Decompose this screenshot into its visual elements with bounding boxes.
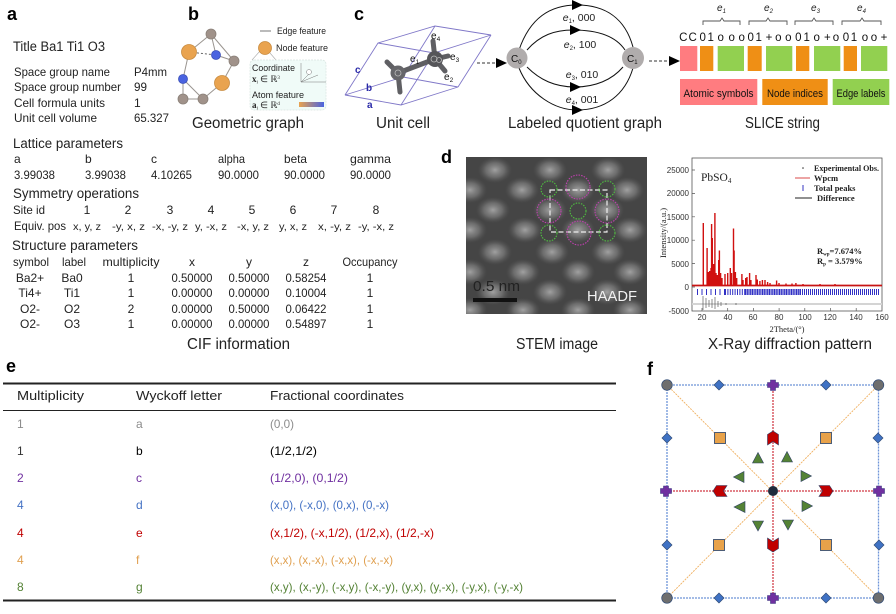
chart legend: Total peaks bbox=[814, 183, 856, 193]
edge labels: 3 bbox=[572, 76, 576, 82]
edge diamonds (d) bbox=[662, 380, 884, 603]
brace labels bbox=[717, 3, 867, 15]
caption: unit cell: Unit cell bbox=[376, 115, 430, 132]
row b: (1/2,1/2) bbox=[270, 444, 317, 458]
row d: d bbox=[136, 498, 143, 512]
diagonal orange lines bbox=[667, 385, 878, 598]
brace labels: 1 bbox=[723, 9, 726, 15]
edge labels: e bbox=[566, 69, 572, 81]
fit statistics: p bbox=[823, 262, 826, 268]
symmetry operations bbox=[13, 186, 394, 233]
symmetry operations: 6 bbox=[290, 203, 297, 217]
diffraction peaks bbox=[692, 213, 882, 310]
fit statistics: R bbox=[817, 246, 823, 256]
row c: 2 bbox=[17, 471, 24, 485]
symmetry operations: 7 bbox=[331, 203, 338, 217]
legend: node indices: Node indices bbox=[767, 88, 823, 100]
row a: 1 bbox=[17, 417, 24, 431]
graph edges bbox=[183, 34, 234, 99]
compound label: 4 bbox=[728, 177, 732, 185]
legend: edge labels: Edge labels bbox=[836, 88, 886, 100]
lattice parameters: a bbox=[14, 152, 21, 166]
colour-coded string segments bbox=[680, 46, 887, 71]
legend: edge labels bbox=[833, 79, 889, 105]
brace labels: 2 bbox=[769, 9, 774, 15]
chart legend bbox=[795, 163, 879, 203]
node feature box: i bbox=[256, 106, 258, 112]
legend: edge and node feature: Node feature bbox=[276, 43, 328, 54]
graph nodes bbox=[178, 29, 239, 104]
edge labels: 1 bbox=[569, 19, 573, 25]
table header: Fractional coordinates bbox=[270, 388, 405, 403]
structure parameters table: 1 bbox=[128, 271, 135, 285]
structure parameters table: O3 bbox=[64, 317, 80, 331]
structure parameters table: Structure parameters bbox=[12, 238, 138, 253]
brace labels: e bbox=[857, 3, 863, 14]
centre site (b) bbox=[768, 486, 778, 496]
symmetry operations: x, -y, z bbox=[318, 221, 351, 233]
x axis ticks and labels: 40 bbox=[724, 313, 733, 322]
structure parameters table: 0.06422 bbox=[286, 302, 327, 316]
structure parameters table: 0.50000 bbox=[172, 271, 213, 285]
axis titles: Intensity/(a.u.) bbox=[658, 208, 668, 258]
label f: f bbox=[647, 359, 654, 379]
structure parameters table: 0.00000 bbox=[172, 317, 213, 331]
row f: f bbox=[136, 553, 140, 567]
crystal metadata: Unit cell volume bbox=[14, 111, 97, 125]
chart legend: Difference bbox=[817, 193, 855, 203]
structure parameters table: 0.10004 bbox=[286, 286, 327, 300]
nodes C0 and C1: 1 bbox=[634, 60, 638, 66]
bond labels: 2 bbox=[450, 77, 454, 84]
structure parameters table: Ti1 bbox=[64, 286, 80, 300]
scale bar: 0.5 nm bbox=[473, 278, 520, 295]
lattice parameters: c bbox=[151, 152, 157, 166]
nodes C0 and C1: C bbox=[511, 54, 518, 65]
legend: edge and node feature: Edge feature bbox=[277, 26, 326, 37]
labeled quotient graph bbox=[506, 0, 662, 132]
crystal metadata: 65.327 bbox=[134, 111, 169, 125]
row a: a bbox=[136, 417, 143, 431]
structure parameters table: 1 bbox=[367, 317, 374, 331]
x axis ticks and labels: 120 bbox=[823, 313, 837, 322]
structure parameters table: 0.00000 bbox=[228, 317, 270, 331]
symmetry operations: 5 bbox=[249, 203, 256, 217]
row d bbox=[17, 498, 389, 512]
HAADF label: HAADF bbox=[587, 288, 637, 305]
node feature box: Coordinate bbox=[252, 63, 295, 74]
symmetry operations: Site id bbox=[13, 203, 45, 217]
crystal metadata: P4mm bbox=[134, 65, 167, 79]
node feature box: Atom feature bbox=[252, 90, 304, 101]
node feature box bbox=[250, 60, 326, 112]
label c: c bbox=[354, 4, 364, 24]
y axis ticks and labels: -5000 bbox=[669, 307, 690, 316]
row d: (x,0), (-x,0), (0,x), (0,-x) bbox=[270, 498, 389, 512]
structure parameters table bbox=[12, 238, 398, 331]
node feature box: 3 bbox=[277, 76, 280, 81]
lattice parameters: 4.10265 bbox=[151, 168, 192, 182]
table rules bbox=[3, 382, 616, 602]
label d: d bbox=[441, 147, 452, 167]
structure parameters table: multiplicity bbox=[102, 255, 160, 269]
XRD chart bbox=[658, 158, 889, 353]
orange squares (f) bbox=[714, 432, 832, 550]
corner sites (a) bbox=[662, 380, 884, 603]
brace labels: 3 bbox=[817, 9, 821, 15]
node feature box: d bbox=[277, 102, 280, 107]
nodes C0 and C1 bbox=[506, 47, 644, 69]
chart legend: Experimental Obs. bbox=[814, 163, 879, 173]
node feature box: x bbox=[252, 74, 256, 84]
symmetry operations: 4 bbox=[208, 203, 215, 217]
edges bbox=[519, 5, 633, 110]
legend: node indices bbox=[762, 79, 828, 105]
x axis ticks and labels: 80 bbox=[775, 313, 784, 322]
crystal metadata: Cell formula units bbox=[14, 96, 105, 110]
row g bbox=[17, 580, 523, 594]
edge labels: 4 bbox=[572, 101, 576, 107]
bond labels: 4 bbox=[437, 36, 441, 43]
axis labels: c bbox=[355, 65, 361, 76]
symmetry operations: y, x, z bbox=[279, 221, 307, 233]
structure parameters table: 0.00000 bbox=[172, 302, 213, 316]
string characters: CC01ooo01+oo01o+o01oo+ bbox=[679, 32, 888, 44]
Bragg position ticks bbox=[697, 289, 880, 295]
legend: edge and node feature bbox=[252, 26, 328, 60]
nodes C0 and C1: C bbox=[627, 54, 634, 65]
symmetry operations: -x, -y, z bbox=[152, 221, 188, 233]
node feature box: a bbox=[252, 100, 256, 110]
structure parameters table: 0.00000 bbox=[172, 286, 213, 300]
structure parameters table: Occupancy bbox=[342, 255, 398, 269]
node feature box: ∈ ℝ bbox=[258, 100, 277, 110]
structure parameters table: 1 bbox=[128, 317, 135, 331]
bond labels: e bbox=[450, 52, 456, 63]
structure parameters table: 1 bbox=[367, 302, 374, 316]
symmetry operations: 1 bbox=[84, 203, 91, 217]
structure parameters table: O2- bbox=[20, 302, 40, 316]
row d: 4 bbox=[17, 498, 24, 512]
table header bbox=[17, 388, 405, 403]
row c bbox=[17, 471, 348, 485]
y axis ticks and labels: 10000 bbox=[667, 236, 690, 245]
row g: g bbox=[136, 580, 143, 594]
label b: b bbox=[188, 4, 199, 24]
HAADF micrograph bbox=[466, 157, 647, 314]
red cross lines bbox=[667, 385, 878, 598]
crystal metadata bbox=[14, 65, 169, 125]
fit statistics bbox=[817, 246, 863, 268]
structure parameters table: 1 bbox=[367, 286, 374, 300]
row g: (x,y), (x,-y), (-x,y), (-x,-y), (y,x), (y,-x), (-y,x), (-y,-x) bbox=[270, 580, 523, 594]
crystal metadata: Space group name bbox=[14, 65, 110, 79]
y axis ticks and labels bbox=[667, 166, 695, 316]
symmetry operations: 2 bbox=[125, 203, 132, 217]
structure parameters table: 0.54897 bbox=[286, 317, 327, 331]
caption: CIF information: CIF information bbox=[187, 336, 290, 353]
row e: 4 bbox=[17, 526, 24, 540]
structure parameters table: 1 bbox=[367, 271, 374, 285]
panel c: unit cell bbox=[345, 4, 491, 132]
brace labels: e bbox=[764, 3, 770, 14]
caption: labeled quotient graph: Labeled quotient graph bbox=[508, 115, 662, 132]
unit cell wireframe bbox=[345, 26, 491, 105]
lattice parameters: beta bbox=[284, 152, 307, 166]
lattice parameters: Lattice parameters bbox=[13, 136, 123, 151]
axis labels: b bbox=[366, 83, 372, 94]
unit cell overlay bbox=[537, 175, 619, 245]
structure parameters table: 2 bbox=[128, 302, 135, 316]
crystal metadata: 99 bbox=[134, 80, 147, 94]
panel d: STEM image bbox=[441, 147, 647, 353]
structure parameters table: 0.58254 bbox=[286, 271, 327, 285]
symmetry operations: Symmetry operations bbox=[13, 186, 139, 201]
row a: (0,0) bbox=[270, 417, 294, 431]
edge labels: 2 bbox=[570, 46, 574, 52]
structure parameters table: symbol bbox=[13, 255, 49, 269]
fit statistics: wp bbox=[823, 252, 830, 258]
bond labels: e bbox=[410, 54, 416, 65]
symmetry operations: 8 bbox=[373, 203, 380, 217]
red chevrons (e) bbox=[713, 431, 833, 552]
symmetry operations: y, -x, z bbox=[195, 221, 227, 233]
x axis ticks and labels: 20 bbox=[698, 313, 707, 322]
structure parameters table: Ti4+ bbox=[18, 286, 42, 300]
axis labels bbox=[355, 65, 373, 111]
edge labels: e bbox=[566, 94, 572, 106]
axis labels: a bbox=[367, 100, 373, 111]
edge labels: , 001 bbox=[575, 94, 598, 106]
y axis ticks and labels: 0 bbox=[685, 283, 690, 292]
arrow: quotient graph to SLICE string bbox=[649, 56, 680, 66]
axis titles bbox=[658, 208, 805, 334]
structure parameters table: 0.50000 bbox=[228, 302, 270, 316]
row b bbox=[17, 444, 317, 458]
lattice parameters: gamma bbox=[350, 152, 391, 166]
row b: b bbox=[136, 444, 143, 458]
edge labels: , 010 bbox=[575, 69, 598, 81]
x axis ticks and labels: 160 bbox=[875, 313, 889, 322]
chart legend: Wpcm bbox=[814, 173, 838, 183]
y axis ticks and labels: 15000 bbox=[667, 213, 690, 222]
symmetry operations: 3 bbox=[167, 203, 174, 217]
structure parameters table: Ba2+ bbox=[16, 271, 44, 285]
structure parameters table: label bbox=[62, 255, 86, 269]
label e: e bbox=[6, 356, 16, 376]
difference curve bbox=[692, 303, 882, 305]
caption: SLICE string: SLICE string bbox=[745, 115, 820, 132]
lattice parameters: 90.0000 bbox=[218, 168, 259, 182]
bond labels: e bbox=[431, 31, 437, 42]
fit statistics: R bbox=[817, 256, 823, 266]
brace labels: e bbox=[811, 3, 817, 14]
bond labels: 1 bbox=[416, 59, 420, 66]
symmetry operations: -x, y, z bbox=[237, 221, 269, 233]
purple plus sites (c) bbox=[660, 380, 884, 604]
bond labels: 3 bbox=[456, 57, 460, 64]
y axis ticks and labels: 25000 bbox=[667, 166, 690, 175]
node feature box: ∈ ℝ bbox=[258, 74, 277, 84]
blue border bbox=[667, 385, 878, 598]
row f: 4 bbox=[17, 553, 24, 567]
lattice parameters: 90.0000 bbox=[350, 168, 391, 182]
edge labels bbox=[563, 12, 598, 107]
structure parameters table: 0.00000 bbox=[228, 286, 270, 300]
panel b: geometric graph bbox=[178, 4, 328, 132]
plot frame bbox=[692, 158, 882, 311]
row b: 1 bbox=[17, 444, 24, 458]
bond labels: e bbox=[444, 72, 450, 83]
panel f: Wyckoff site diagram bbox=[647, 359, 884, 604]
fit statistics: = 3.579% bbox=[826, 256, 863, 266]
structure parameters table: O2- bbox=[20, 317, 40, 331]
structure parameters table: 0.50000 bbox=[228, 271, 270, 285]
structure parameters table: z bbox=[303, 255, 309, 269]
caption: XRD pattern: X-Ray diffraction pattern bbox=[708, 336, 872, 353]
y axis ticks and labels: 5000 bbox=[671, 260, 690, 269]
row c: c bbox=[136, 471, 142, 485]
symmetry operations: x, y, z bbox=[73, 221, 101, 233]
row e: (x,1/2), (-x,1/2), (1/2,x), (1/2,-x) bbox=[270, 526, 434, 540]
symmetry operations: -y, x, z bbox=[112, 221, 145, 233]
symmetry operations: Equiv. pos bbox=[14, 219, 66, 233]
panel a: CIF information bbox=[7, 4, 398, 353]
fit statistics: =7.674% bbox=[830, 246, 862, 256]
x axis ticks and labels bbox=[698, 308, 889, 322]
brace labels: e bbox=[717, 3, 723, 14]
compound label: PbSO bbox=[701, 172, 728, 184]
SLICE string panel bbox=[679, 3, 889, 132]
molecule bonds and atoms bbox=[387, 41, 448, 92]
edge labels: e bbox=[563, 12, 569, 24]
label a: a bbox=[7, 4, 18, 24]
edge braces bbox=[703, 18, 881, 25]
caption: geometric graph: Geometric graph bbox=[192, 115, 304, 132]
brace labels: 4 bbox=[863, 9, 867, 15]
edge labels: , 100 bbox=[573, 39, 596, 51]
green triangles (g) bbox=[734, 452, 812, 531]
arrowheads bbox=[570, 0, 583, 115]
row a bbox=[17, 417, 294, 431]
title line: Title Ba1 Ti1 O3 bbox=[13, 39, 105, 54]
lattice parameters: alpha bbox=[218, 152, 245, 166]
crystal metadata: Space group number bbox=[14, 80, 121, 94]
edge labels: e bbox=[564, 39, 570, 51]
row f: (x,x), (x,-x), (-x,x), (-x,-x) bbox=[270, 553, 393, 567]
bond labels bbox=[410, 31, 460, 84]
structure parameters table: x bbox=[189, 255, 195, 269]
structure parameters table: Ba0 bbox=[61, 271, 83, 285]
lattice parameters: b bbox=[85, 152, 92, 166]
row e: e bbox=[136, 526, 143, 540]
axis titles: 2Theta/(°) bbox=[769, 324, 805, 334]
nodes C0 and C1: 0 bbox=[518, 60, 522, 66]
structure parameters table: O2 bbox=[64, 302, 80, 316]
scale bar bbox=[473, 278, 520, 302]
legend: atomic symbols bbox=[680, 79, 757, 105]
node feature box: i bbox=[256, 80, 258, 86]
panel e: Wyckoff table bbox=[3, 356, 616, 602]
caption: STEM image: STEM image bbox=[516, 336, 598, 353]
lattice parameters: 90.0000 bbox=[284, 168, 325, 182]
edge labels: , 000 bbox=[572, 12, 595, 24]
row c: (1/2,0), (0,1/2) bbox=[270, 471, 348, 485]
structure parameters table: 1 bbox=[128, 286, 135, 300]
x axis ticks and labels: 60 bbox=[749, 313, 758, 322]
row f bbox=[17, 553, 393, 567]
y axis ticks and labels: 20000 bbox=[667, 189, 690, 198]
symmetry operations: -y, -x, z bbox=[358, 221, 394, 233]
legend: atomic symbols: Atomic symbols bbox=[684, 88, 754, 100]
lattice parameters: 3.99038 bbox=[14, 168, 55, 182]
table header: Wyckoff letter bbox=[136, 388, 223, 403]
row g: 8 bbox=[17, 580, 24, 594]
x axis ticks and labels: 140 bbox=[849, 313, 863, 322]
x axis ticks and labels: 100 bbox=[798, 313, 812, 322]
table header: Multiplicity bbox=[17, 388, 85, 403]
lattice parameters bbox=[13, 136, 391, 182]
lattice parameters: 3.99038 bbox=[85, 168, 126, 182]
arrow: unit cell to quotient graph bbox=[477, 58, 507, 68]
structure parameters table: y bbox=[246, 255, 252, 269]
row e bbox=[17, 526, 434, 540]
crystal metadata: 1 bbox=[134, 96, 141, 110]
